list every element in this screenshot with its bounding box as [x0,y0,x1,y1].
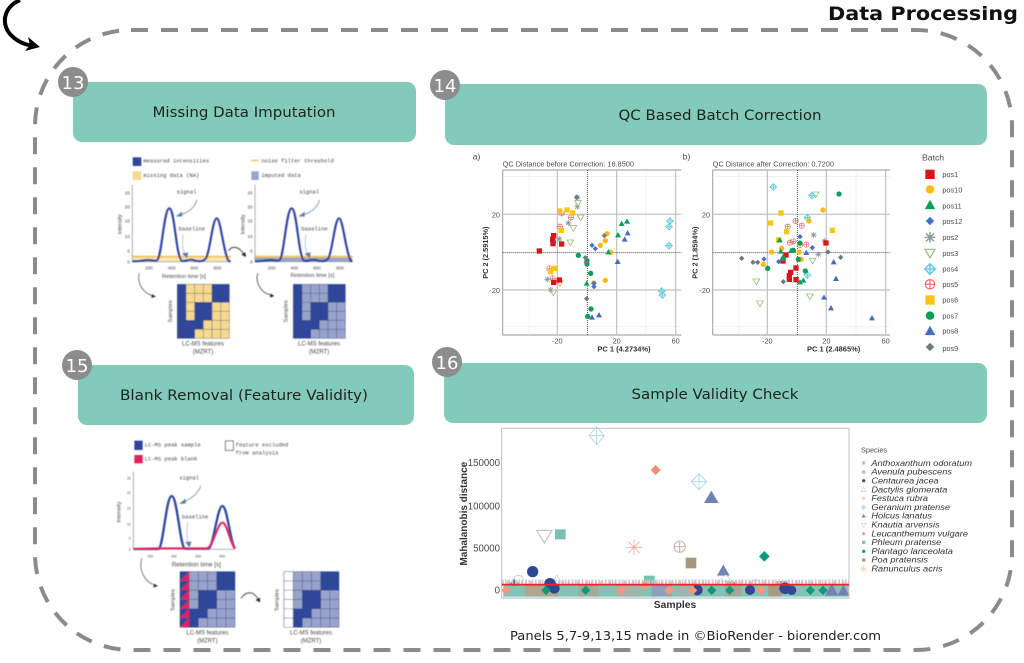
legend: batch: pos7 [942,311,958,320]
line chart: after imputation: 10 [247,234,253,239]
matrix: missing data [168,284,229,355]
heading panel 16: sample validity check [432,347,987,423]
chart frame and axes: 50000 [473,543,500,554]
line chart: sample and blank peaks: 5 [129,536,131,540]
legend: species [861,446,972,573]
figure: missing data imputation charts [118,157,352,355]
arrow: matrix to filtered matrix [241,593,260,602]
chart frame and axes: 100000 [468,501,500,512]
line chart: sample and blank peaks [117,472,235,569]
legend: batch: pos3 [942,249,958,258]
legend: imputation [133,157,334,180]
legend: species: Leucanthemum vulgare [871,528,968,538]
legend: species: Poa pratensis [871,555,928,565]
line chart: after imputation: signal [299,189,319,196]
line chart: after imputation: 20 [247,204,253,209]
scatter plot b: after correction: PC 2 (1.8594%) [690,226,699,279]
outlier points [510,427,787,589]
scatter plot b: after correction: 20 [822,337,830,346]
line chart: before imputation: signal [177,189,196,196]
legend: blank removal [134,441,288,463]
title: Data Processing [828,3,1018,25]
matrix: blank removed [274,572,339,645]
figure: QC batch correction scatter plots [473,151,962,354]
scatter plot a: before correction: 20 [492,210,500,219]
legend: batch: Batch [922,153,944,163]
line chart: sample and blank peaks: 200 [148,554,153,558]
matrix: blank removed: Samples [274,589,280,611]
legend: batch: pos6 [942,296,958,305]
chart frame and axes: Samples [654,600,696,611]
legend: species: Centaurea jacea [871,476,939,486]
scatter plot a: before correction: QC Distance before Correction: 16.8500 [503,160,634,169]
line chart: after imputation: 800 [336,266,344,271]
legend: batch: pos8 [942,327,958,336]
chart frame and axes: 150000 [468,458,500,469]
arrow: chart to matrix left [139,273,156,298]
matrix: missing data: Samples [168,300,174,322]
line chart: sample and blank peaks: 0 [129,548,131,552]
line chart: after imputation: 200 [268,266,276,271]
legend: species: Plantago lanceolata [871,546,953,556]
line chart: sample and blank peaks: 600 [196,554,201,558]
line chart: sample and blank peaks: 10 [127,522,131,526]
matrix: blank removed: LC-MS features [290,630,332,636]
matrix: blank removed: (MZRT) [301,639,321,645]
line chart: after imputation [240,185,352,279]
line chart: before imputation: 400 [168,266,176,271]
line chart: after imputation: 600 [313,266,321,271]
chart frame and axes: Mahalanobis distance [459,461,470,566]
scatter plot a: before correction: PC 1 (4.2734%) [597,345,651,354]
scatter plot b: after correction: 60 [882,337,890,346]
figure: blank removal charts [117,441,339,645]
heading panel 13: missing data imputation: Missing Data Imputation [152,105,336,121]
scatter plot b: after correction: -20 [699,286,710,295]
legend: batch: pos10 [942,185,962,194]
scatter plot a: before correction [473,151,681,354]
legend: batch: pos2 [942,233,958,242]
heading panel 15: blank removal: Blank Removal (Feature Validity) [120,388,368,404]
heading panel 15: blank removal [62,350,414,425]
line chart: sample and blank peaks: Retention time [s] [172,562,221,569]
line chart: before imputation: 25 [125,190,130,195]
legend: species: Dactylis glomerata [871,484,948,494]
legend: species: Anthoxanthum odoratum [870,458,972,468]
matrix: blank flagged: (MZRT) [197,639,218,645]
legend: species: Avenula pubescens [870,467,952,477]
line chart: before imputation: 20 [125,204,130,209]
legend: species: Species [861,446,887,455]
legend: imputation: measured intensities [143,157,209,164]
arrow: chart to matrix right [257,273,274,298]
line chart: sample and blank peaks: 15 [127,506,131,510]
legend: species: Holcus lanatus [871,511,932,521]
line chart: sample and blank peaks: 20 [127,491,131,495]
line chart: after imputation: 0 [250,260,253,265]
legend: species: Phleum pratense [871,537,942,547]
legend: batch: pos12 [942,217,962,226]
legend: species: Knautia arvensis [871,520,940,530]
scatter plot b: after correction: PC 1 (2.4865%) [807,345,861,354]
figure: Mahalanobis distance chart [459,427,972,611]
line chart: before imputation: 0 [127,260,130,265]
arrow: chart to chart [229,247,246,257]
chart frame and axes [459,428,849,611]
line chart: after imputation: 5 [250,248,253,253]
heading panel 13: missing data imputation [58,67,416,142]
legend: blank removal: LC-MS peak blank [145,455,198,462]
legend: batch: pos5 [942,280,958,289]
line chart: after imputation: 15 [247,219,253,224]
footer credit: Panels 5,7-9,13,15 made in ©BioRender - biorender.com [510,629,881,643]
scatter plot a: before correction: 60 [672,337,680,346]
line chart: before imputation: baseline [179,226,205,233]
legend: batch: pos4 [942,265,958,274]
heading panel 13: missing data imputation: 13 [62,73,84,94]
line chart: before imputation: 200 [145,266,153,271]
scatter plot a: before correction: PC 2 (2.5915%) [481,226,490,279]
legend: blank removal: LC-MS peak sample [145,441,201,448]
scatter plot b: after correction: QC Distance after Correction: 0.7200 [713,160,834,169]
scatter plot b: after correction: -20 [762,337,773,346]
dense point band at baseline [501,578,849,599]
legend: batch: pos1 [942,170,958,179]
legend: batch [922,153,962,353]
legend: imputation: imputed data [261,172,302,179]
scatter plot b: after correction: 20 [702,210,710,219]
matrix: imputed data: (MZRT) [309,349,329,355]
matrix: blank flagged [171,572,235,645]
line chart: before imputation: 10 [125,234,130,239]
line chart: sample and blank peaks: Intensity [117,501,123,523]
line chart: before imputation: Intensity [118,214,124,234]
heading panel 15: blank removal: 15 [66,356,88,377]
line chart: after imputation: Intensity [240,214,246,234]
legend: blank removal: from analysis [236,450,278,457]
matrix: imputed data [283,284,345,355]
line chart: before imputation [118,185,231,280]
matrix: blank flagged: LC-MS features [186,630,228,636]
line chart: after imputation: 25 [247,190,253,195]
line chart: after imputation: 400 [290,266,299,271]
heading panel 16: sample validity check: 16 [436,353,458,374]
legend: imputation: missing data (NA) [143,172,199,179]
matrix: missing data: LC-MS features [182,342,224,348]
scatter plot b: after correction: b) [683,151,690,161]
scatter plot a: before correction: a) [473,151,480,161]
legend: species: Festuca rubra [871,493,928,503]
line chart: before imputation: 800 [213,266,222,271]
legend: blank removal: feature excluded [236,441,288,448]
scatter plot a: before correction: -20 [552,337,563,346]
line chart: before imputation: Retention time [s] [162,274,206,280]
matrix: blank flagged: Samples [171,589,177,611]
arrow: from previous stage [5,0,40,51]
scatter plot b: after correction [683,151,962,354]
matrix: imputed data: Samples [283,300,289,322]
line chart: sample and blank peaks: 25 [127,476,131,480]
scatter plot a: before correction: 20 [613,337,621,346]
line chart: sample and blank peaks: 800 [220,554,225,558]
line chart: sample and blank peaks: signal [179,475,199,482]
line chart: sample and blank peaks: 400 [171,554,177,558]
line chart: before imputation: 15 [125,219,130,224]
heading panel 14: QC based batch correction [430,70,987,145]
legend: species: Ranunculus acris [871,563,943,573]
matrix: missing data: (MZRT) [193,349,213,355]
line chart: after imputation: Retention time [s] [290,273,335,279]
heading panel 16: sample validity check: Sample Validity Check [632,387,799,403]
line chart: before imputation: 5 [127,248,130,253]
scatter plot a: before correction: -20 [489,286,500,295]
threshold line [502,582,849,587]
legend: species: Geranium pratense [871,502,950,512]
matrix: imputed data: LC-MS features [298,342,340,348]
legend: batch: pos9 [942,344,958,353]
chart frame and axes: 0 [495,586,500,597]
line chart: sample and blank peaks: baseline [182,513,208,520]
legend: imputation: noise filter threshold [261,157,334,164]
arrow: chart to matrix [141,558,158,588]
heading panel 14: QC based batch correction: 14 [434,76,456,97]
legend: batch: pos11 [942,201,962,210]
line chart: before imputation: 600 [190,266,199,271]
heading panel 14: QC based batch correction: QC Based Batch Correction [618,108,822,124]
line chart: after imputation: baseline [301,226,328,233]
